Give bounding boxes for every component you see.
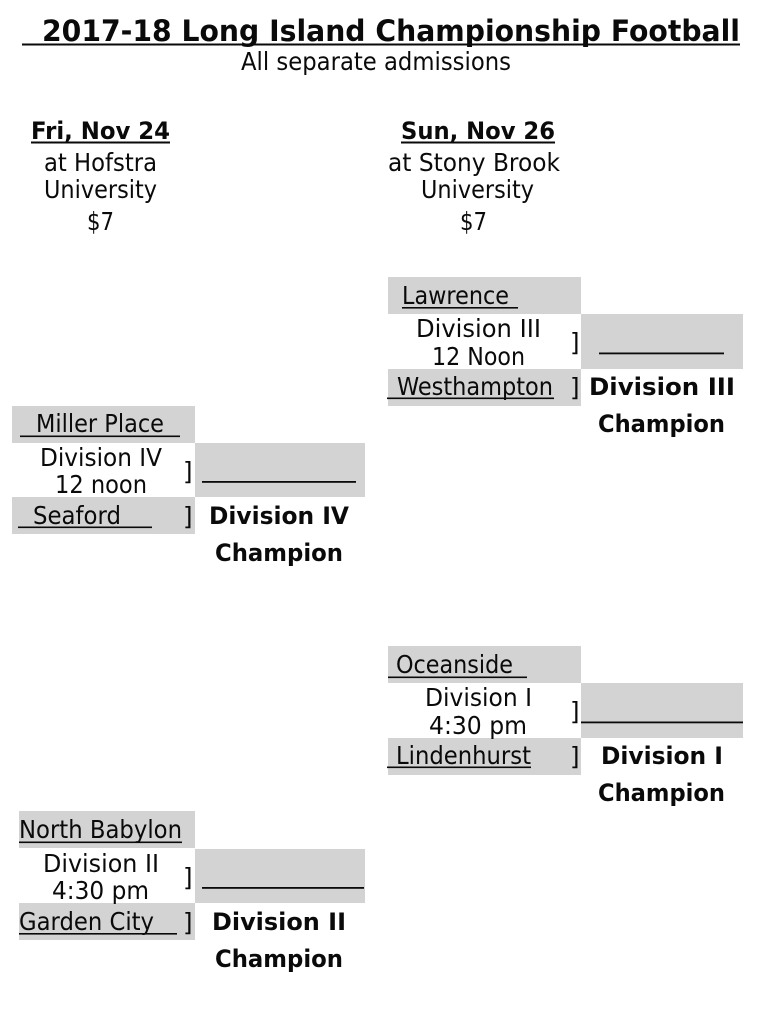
panel: Division I bracket xyxy=(387,646,743,807)
champion label: Division II: Division II xyxy=(212,908,346,936)
team: Lawrence: Lawrence xyxy=(402,281,509,310)
champion line xyxy=(599,352,724,354)
champion label: Division II: Champion xyxy=(215,945,343,973)
game info: Division II: 4:30 pm xyxy=(52,876,149,905)
brackets xyxy=(570,697,580,771)
venue: Stony Brook: University xyxy=(421,175,534,204)
brackets: ] xyxy=(570,328,580,357)
brackets: ] xyxy=(183,863,193,892)
venue: Hofstra: at Hofstra xyxy=(44,148,157,177)
champion label: Division III: Champion xyxy=(598,410,725,438)
champion label: Division I: Champion xyxy=(598,779,725,807)
panel: Division III bracket xyxy=(387,277,743,438)
champion line xyxy=(202,481,356,483)
team: Miller Place: Miller Place xyxy=(36,409,164,438)
venue: Stony Brook xyxy=(388,148,561,236)
team: Oceanside: Oceanside xyxy=(396,650,513,679)
team: North Babylon: North Babylon xyxy=(19,815,182,844)
champion line xyxy=(581,722,743,723)
game info: Division IV: 12 noon xyxy=(55,470,147,499)
brackets xyxy=(570,328,580,402)
brackets: ] xyxy=(183,457,193,486)
brackets: ] xyxy=(183,502,193,531)
game info: Division IV xyxy=(40,443,162,499)
champion label: Division III xyxy=(589,373,735,438)
date heading: Sunday: Sun, Nov 26 xyxy=(401,117,555,145)
brackets: ] xyxy=(570,373,580,402)
champion label: Division II xyxy=(212,908,346,973)
venue: Stony Brook: $7 xyxy=(460,207,487,236)
game info: Division I: 4:30 pm xyxy=(429,711,527,740)
venue: Stony Brook: at Stony Brook xyxy=(388,148,561,177)
champion label: Division I: Division I xyxy=(601,742,723,770)
brackets xyxy=(183,457,193,531)
team: Westhampton: Westhampton xyxy=(397,372,553,401)
champion line xyxy=(202,887,364,889)
champion label: Division III: Division III xyxy=(589,373,735,401)
subtitle: All separate admissions xyxy=(241,47,511,76)
date heading: Friday: Fri, Nov 24 xyxy=(31,117,170,145)
brackets xyxy=(183,863,193,937)
champion label: Division I xyxy=(598,742,725,807)
game info: Division III: 12 Noon xyxy=(432,342,525,371)
game info: Division I xyxy=(425,683,532,740)
venue: Hofstra: University xyxy=(44,175,157,204)
game info: Division III: Division III xyxy=(416,314,541,343)
brackets: ] xyxy=(183,908,193,937)
panel: Division II bracket xyxy=(19,811,365,973)
panel: Division IV bracket xyxy=(12,406,365,567)
team: Lindenhurst: Lindenhurst xyxy=(396,741,531,770)
brackets: ] xyxy=(570,742,580,771)
game info: Division III xyxy=(416,314,541,371)
game info: Division IV: Division IV xyxy=(40,443,162,472)
team: Garden City: Garden City xyxy=(19,907,154,936)
champion label: Division IV: Champion xyxy=(215,539,343,567)
game info: Division II xyxy=(43,849,159,905)
game info: Division II: Division II xyxy=(43,849,159,878)
team: Seaford: Seaford xyxy=(33,501,121,530)
venue: Hofstra xyxy=(44,148,157,236)
game info: Division I: Division I xyxy=(425,683,532,712)
venue: Hofstra: $7 xyxy=(87,207,114,236)
champion label: Division IV xyxy=(209,502,349,567)
title: 2017-18 Long Island Championship Football xyxy=(42,14,740,48)
brackets: ] xyxy=(570,697,580,726)
champion label: Division IV: Division IV xyxy=(209,502,349,530)
